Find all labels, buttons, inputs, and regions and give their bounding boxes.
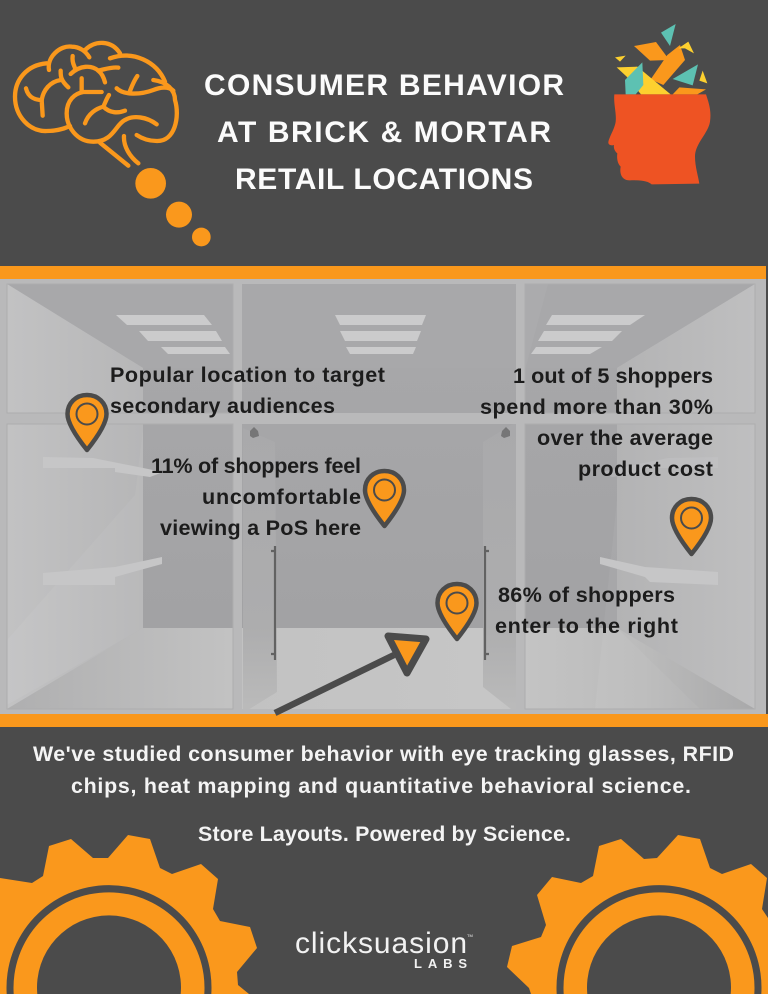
text block: study description: chips, heat mapping and quantitative behavioral science. bbox=[71, 774, 691, 798]
callout: secondary audiences: Popular location to target bbox=[110, 362, 385, 387]
icon: map pin right bbox=[672, 499, 711, 554]
ceiling bbox=[7, 284, 755, 368]
logo: clicksuasion labs: clicksuasion bbox=[295, 927, 467, 960]
icon: map pin center bbox=[365, 471, 404, 526]
callout: 1 out of 5 shoppers: spend more than 30% bbox=[480, 394, 713, 419]
back wall bbox=[143, 368, 617, 628]
title: AT BRICK & MORTAR bbox=[217, 116, 551, 149]
icon: gear right bbox=[507, 835, 768, 994]
callout: secondary audiences: secondary audiences bbox=[110, 393, 335, 418]
title: CONSUMER BEHAVIOR bbox=[204, 69, 564, 102]
text block: study description bbox=[33, 742, 734, 798]
text block: study description: We've studied consumer behavior with eye tracking glasses, RFID bbox=[33, 742, 734, 766]
shelves bbox=[43, 457, 718, 585]
panel: store interior bbox=[0, 279, 768, 714]
doors bbox=[243, 428, 277, 713]
icon: map pin entrance bbox=[438, 584, 476, 639]
callout: secondary audiences bbox=[110, 362, 385, 418]
logo: clicksuasion labs: TM bbox=[467, 933, 473, 938]
ceiling lights bbox=[116, 315, 645, 354]
title bbox=[204, 69, 564, 196]
left wall bbox=[7, 284, 143, 709]
callout: 86% enter right: 86% of shoppers bbox=[498, 582, 675, 607]
callout: 86% enter right: enter to the right bbox=[495, 613, 678, 638]
logo: clicksuasion labs: LABS bbox=[414, 956, 467, 971]
glass reflections bbox=[7, 430, 143, 705]
callout: uncomfortable PoS: 11% of shoppers feel bbox=[151, 453, 361, 478]
callout: 1 out of 5 shoppers: product cost bbox=[578, 456, 713, 481]
callout: 1 out of 5 shoppers: over the average bbox=[537, 425, 713, 450]
callout: uncomfortable PoS: viewing a PoS here bbox=[160, 515, 361, 540]
callout: 1 out of 5 shoppers bbox=[480, 363, 713, 481]
arrow: entry direction bbox=[275, 636, 426, 713]
door handles bbox=[271, 546, 489, 660]
title: RETAIL LOCATIONS bbox=[235, 163, 533, 196]
orange band top bbox=[0, 266, 766, 279]
icon: brain with thought bubbles bbox=[15, 43, 211, 246]
tagline: Store Layouts. Powered by Science. bbox=[198, 822, 571, 846]
callout: 86% enter right bbox=[495, 582, 678, 638]
icon: head with shards bbox=[608, 24, 710, 184]
right wall bbox=[617, 284, 755, 709]
callout: 1 out of 5 shoppers: 1 out of 5 shoppers bbox=[513, 363, 713, 388]
window frame bbox=[0, 279, 766, 714]
icon: gear left bbox=[0, 835, 257, 994]
orange band bottom bbox=[0, 714, 768, 727]
icon: map pin left bbox=[68, 395, 106, 450]
callout: uncomfortable PoS bbox=[151, 453, 361, 540]
floor bbox=[7, 628, 755, 709]
callout: uncomfortable PoS: uncomfortable bbox=[202, 484, 361, 509]
